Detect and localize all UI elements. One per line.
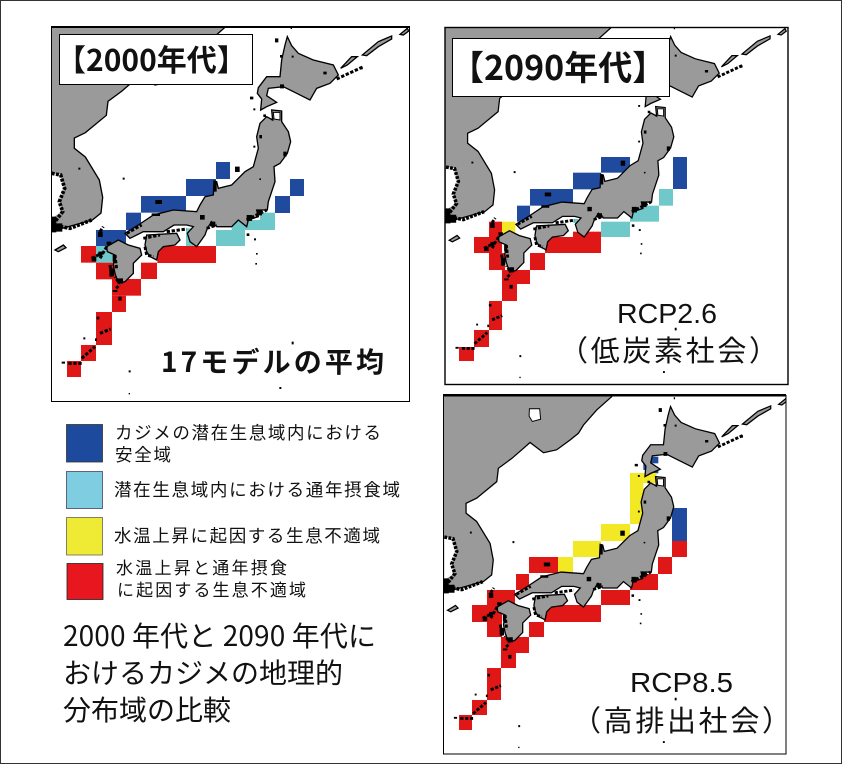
scenario label: RCP8.5: RCP8.5: [630, 667, 733, 698]
panel: 2090s RCP8.5 map: [430, 383, 791, 754]
legend text: safe zone: カジメの潜在生息域内における: [115, 420, 381, 445]
scenario label: RCP2.6: （低炭素社会）: [559, 328, 778, 370]
map cells: RCP8.5: [459, 457, 687, 730]
scenario label: RCP2.6: RCP2.6: [617, 298, 717, 329]
title box: 2000s: 【2000年代】: [56, 36, 247, 80]
legend text: year-round grazing: 潜在生息域内における通年摂食域: [114, 477, 400, 502]
legend text: safe zone: 安全域: [115, 442, 171, 467]
map cells: 2000s: [67, 162, 304, 377]
legend swatch: warming unsuitable: [66, 518, 102, 555]
map land: RCP2.6: [432, 13, 786, 378]
legend text: warming unsuitable: 水温上昇に起因する生息不適域: [114, 523, 380, 548]
title box: 2090s: 【2090年代】: [450, 41, 666, 90]
caption: comparison title: おけるカジメの地理的: [63, 652, 343, 692]
legend text: warming and grazing unsuitable: に起因する生息不適域: [117, 576, 306, 601]
legend swatch: year-round grazing: [66, 472, 102, 508]
legend text: warming and grazing unsuitable: [116, 554, 306, 601]
map land: RCP8.5: [430, 383, 787, 748]
caption: comparison title: 2000 年代と 2090 年代に: [63, 615, 376, 655]
legend swatch: safe zone: [66, 424, 102, 462]
scenario label: RCP8.5: （高排出社会）: [572, 698, 791, 740]
legend text: safe zone: [115, 420, 381, 467]
legend: [66, 420, 400, 601]
legend text: warming and grazing unsuitable: 水温上昇と通年摂食: [116, 554, 287, 579]
map land: 2000s: [37, 12, 409, 394]
caption: comparison title: 分布域の比較: [63, 689, 231, 729]
scenario label: RCP8.5: [572, 667, 791, 740]
legend swatch: warming and grazing unsuitable: [67, 564, 103, 600]
scenario label: RCP2.6: [559, 298, 778, 370]
caption: comparison title: [63, 615, 376, 729]
panel: 2090s RCP2.6 map: [432, 13, 788, 385]
panel: 2000s map: [37, 12, 409, 401]
map cells: RCP2.6: [459, 157, 687, 361]
caption: 17 model average: 17モデルの平均: [161, 341, 384, 381]
